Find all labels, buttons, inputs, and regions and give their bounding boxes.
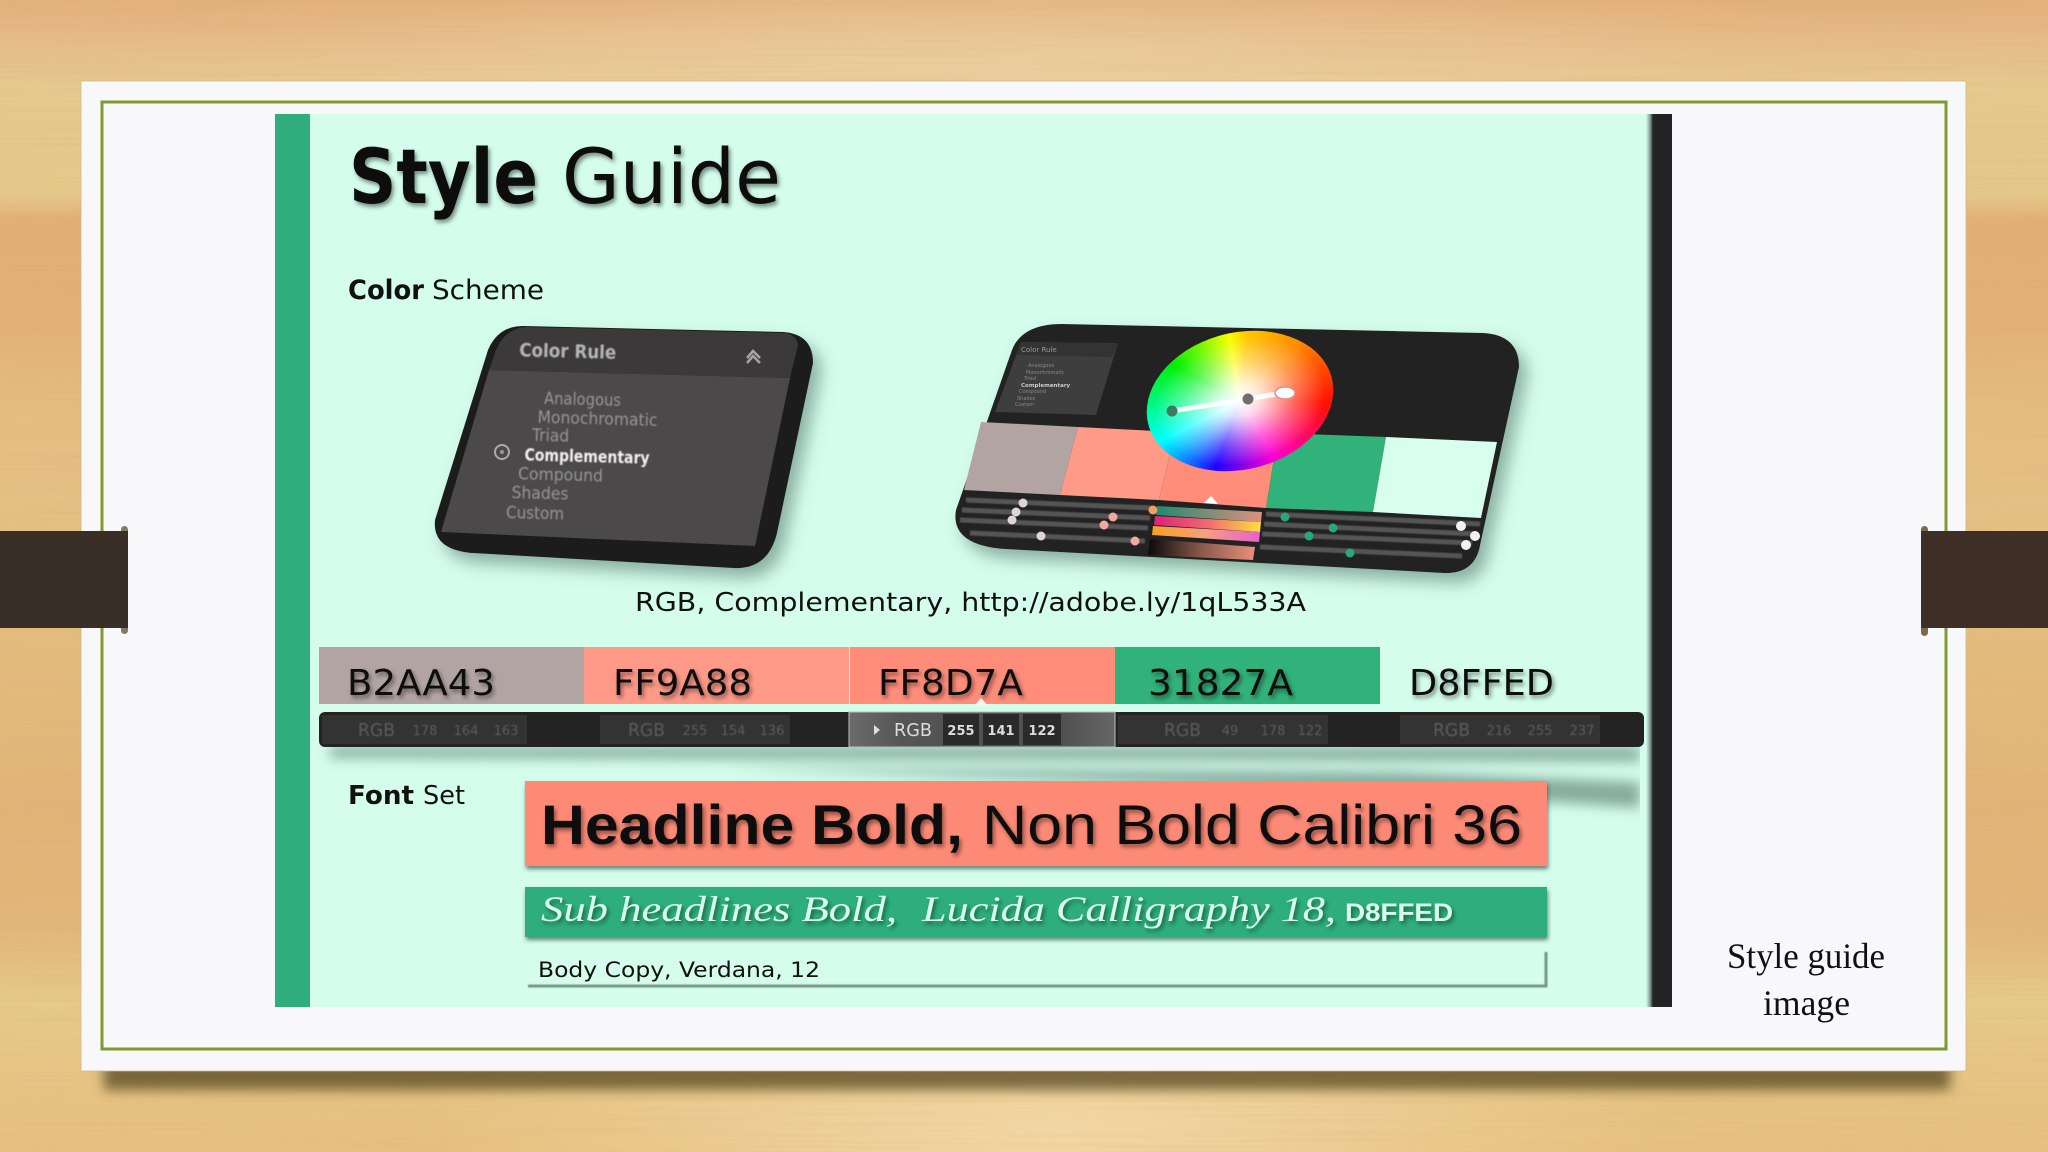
panel: color rule menu: Custom [506, 503, 564, 525]
selected segment: RGB [894, 720, 932, 741]
sub headline font sample: Sub headlines Bold, [541, 889, 897, 929]
panel: color rule menu: Triad [531, 426, 569, 447]
radio icon [495, 445, 509, 459]
mini color rule: Triad [1023, 376, 1036, 382]
dim values: RGB [358, 720, 395, 741]
heading: color scheme [348, 275, 544, 306]
right tape [1921, 526, 2048, 636]
dim values: 136 [760, 724, 784, 739]
sub headline font sample: D8FFED [1345, 899, 1453, 927]
left tape [0, 526, 128, 634]
dim values: 178 [1261, 724, 1285, 739]
panel: color rule menu: Compound [518, 464, 603, 487]
dim values: 49 [1222, 724, 1238, 739]
dim values: 178 [413, 724, 437, 739]
color swatch row [319, 647, 1554, 706]
dim values: 163 [494, 724, 518, 739]
swatch B2AA43 [319, 647, 584, 704]
mini color rule: Compound [1019, 389, 1046, 395]
heading: font set: Font [348, 781, 414, 811]
marker [974, 698, 988, 706]
selected segment: 255 [947, 724, 975, 739]
dim values: RGB [1164, 720, 1201, 741]
caption: rgb complementary link: RGB, Complementary, http://adobe.ly/1qL533A [635, 588, 1306, 618]
heading: font set: Set [423, 781, 465, 811]
dim values: 216 [1487, 724, 1511, 739]
shadows under bar [330, 746, 1640, 808]
paper shadow [104, 1060, 1950, 1090]
selected segment [849, 712, 1115, 747]
dim values: RGB [1433, 720, 1470, 741]
mini color rule: Color Rule [1021, 346, 1057, 354]
swatch D8FFED: D8FFED [1409, 663, 1554, 704]
swatch FF9A88 [584, 647, 849, 704]
dark side strip [1646, 114, 1672, 1007]
heading: font set [348, 781, 465, 811]
sub headline font sample: Lucida Calligraphy 18, [921, 889, 1336, 929]
image caption [1727, 936, 1885, 1023]
heading: color scheme: Scheme [432, 275, 544, 306]
panel: color rule menu: Complementary [524, 446, 650, 469]
panel: color rule menu: Color Rule [519, 339, 617, 364]
image caption: image [1763, 983, 1850, 1023]
mini color rule [995, 342, 1118, 415]
mini color rule: Analogous [1028, 363, 1055, 369]
panel: color rule menu: Shades [511, 483, 569, 505]
swatch FF8D7A [850, 647, 1115, 704]
rgb value bar [319, 712, 1644, 747]
style guide image [275, 114, 1672, 1007]
mini color rule: Custom [1015, 402, 1034, 408]
image background [275, 114, 1672, 1007]
swatch B2AA43: B2AA43 [347, 663, 495, 704]
heading: color scheme: Color [348, 275, 425, 306]
center gradient sliders [1148, 506, 1262, 560]
dim values: 255 [1528, 724, 1552, 739]
body copy font sample [528, 952, 1546, 986]
swatch FF9A88: FF9A88 [613, 663, 752, 704]
green frame [102, 102, 1946, 1049]
title: Guide [562, 132, 781, 221]
selected swatch marker [1204, 496, 1218, 504]
slider lines [960, 500, 1480, 556]
sub headline font sample [525, 887, 1547, 937]
slider dots [1008, 498, 1480, 558]
headline font sample: Headline Bold, [541, 793, 963, 856]
mini color rule: Shades [1017, 396, 1036, 402]
dim values: 122 [1298, 724, 1322, 739]
title: Style [349, 132, 538, 221]
chevron icon [747, 351, 760, 363]
selected segment: 141 [987, 724, 1015, 739]
dim values: 255 [683, 724, 707, 739]
swatch 31827A: 31827A [1148, 663, 1293, 704]
headline font sample: Non Bold Calibri 36 [982, 793, 1522, 856]
title [349, 132, 781, 221]
dim values: 164 [454, 724, 478, 739]
swatches [964, 422, 1078, 495]
dim values [358, 720, 1594, 741]
panel: color rule menu [435, 326, 813, 568]
swatch FF8D7A: FF8D7A [878, 663, 1023, 704]
body copy font sample: Body Copy, Verdana, 12 [538, 958, 820, 982]
dim values: 154 [721, 724, 745, 739]
icon: color wheel [1140, 325, 1340, 477]
dim values: 237 [1570, 724, 1594, 739]
headline font sample [525, 781, 1547, 866]
panel: color rule menu: Monochromatic [537, 408, 658, 431]
swatch 31827A [1115, 647, 1380, 704]
mini color rule: Complementary [1021, 383, 1071, 389]
dim values: RGB [628, 720, 665, 741]
panel: color rule menu: Analogous [544, 389, 621, 411]
panel: adobe color wheel [955, 324, 1519, 573]
green side strip [275, 114, 310, 1007]
image caption: Style guide [1727, 936, 1885, 976]
mini color rule: Monochromatic [1026, 370, 1065, 376]
paper card [81, 81, 1966, 1071]
dim value boxes [322, 715, 1600, 744]
selected segment: 122 [1028, 724, 1056, 739]
